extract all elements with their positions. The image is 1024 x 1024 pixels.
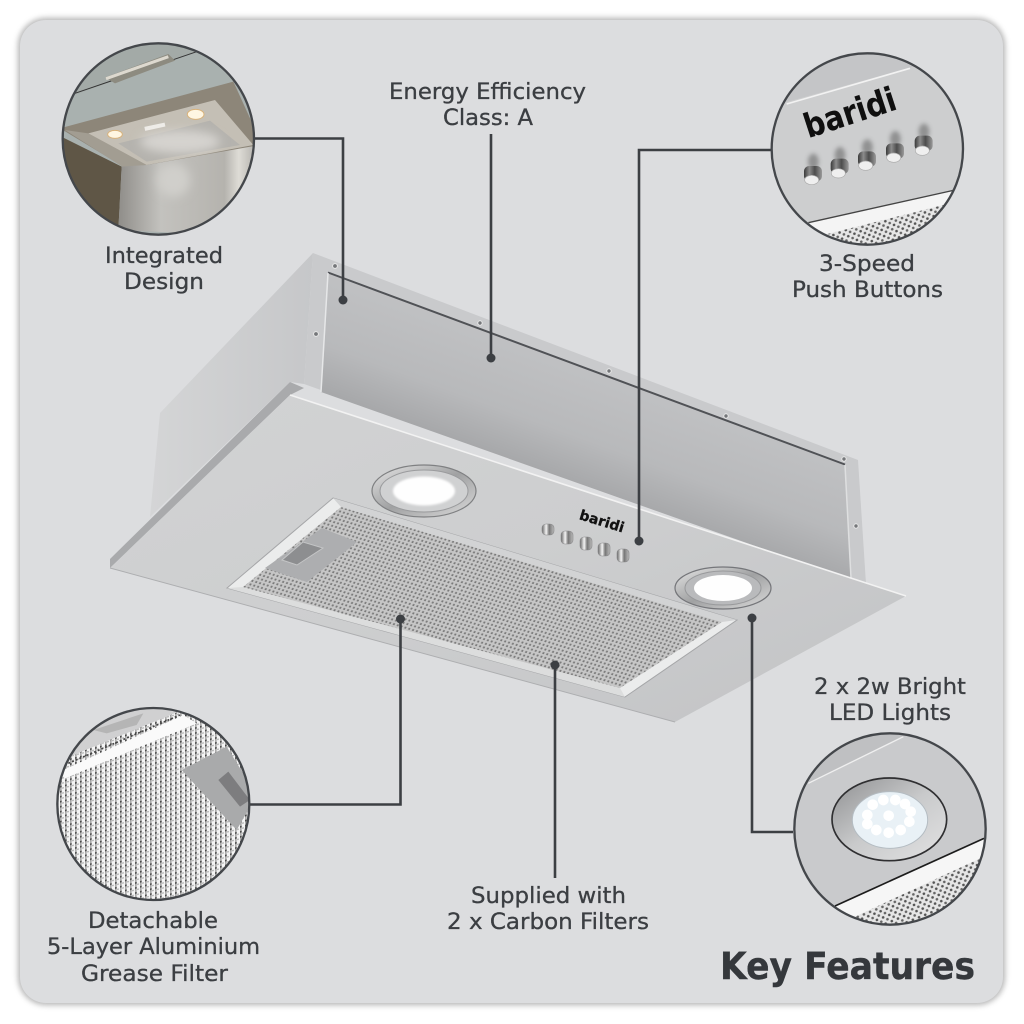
label: integrated design: Design — [124, 270, 204, 295]
label: carbon filters: Supplied with — [471, 884, 626, 909]
label: energy efficiency: Energy Efficiency — [389, 80, 586, 105]
plate underside — [110, 395, 906, 722]
label: push buttons: 3-Speed — [819, 252, 915, 277]
filter panel — [227, 498, 737, 697]
label: grease filter: Grease Filter — [81, 962, 229, 987]
label: push buttons: Push Buttons — [792, 278, 943, 303]
control buttons and logo — [542, 508, 629, 562]
product: built-in cooker hood — [110, 253, 906, 722]
label: carbon filters: 2 x Carbon Filters — [447, 910, 649, 935]
title: Key Features — [720, 945, 975, 988]
leader line: grease filter — [250, 614, 405, 804]
leader line: push buttons — [634, 150, 772, 546]
label: energy efficiency: Class: A — [443, 106, 533, 131]
label: LED lights: 2 x 2w Bright — [814, 675, 966, 700]
label: LED lights: LED Lights — [829, 701, 951, 726]
hood back panel — [304, 253, 866, 584]
light left — [372, 465, 476, 517]
leader line: LED lights — [748, 614, 793, 832]
filter handle — [265, 528, 357, 582]
hood side face — [150, 253, 313, 517]
leader line: integrated design — [252, 138, 348, 304]
label: grease filter: Detachable — [88, 909, 218, 934]
circle inset: grease filter — [53, 702, 257, 905]
circle inset: push buttons — [770, 50, 970, 250]
circle inset: integrated design — [60, 40, 260, 240]
circle inset: push buttons: baridi — [799, 79, 901, 146]
label: grease filter: 5-Layer Aluminium — [47, 935, 260, 960]
leader line: energy efficiency — [486, 134, 496, 362]
plate edge — [110, 382, 304, 568]
light right — [675, 567, 771, 609]
control buttons and logo: baridi — [577, 508, 626, 536]
leader line: carbon filters — [550, 660, 560, 878]
circle inset: LED lights — [793, 727, 993, 933]
label: integrated design: Integrated — [105, 244, 223, 269]
